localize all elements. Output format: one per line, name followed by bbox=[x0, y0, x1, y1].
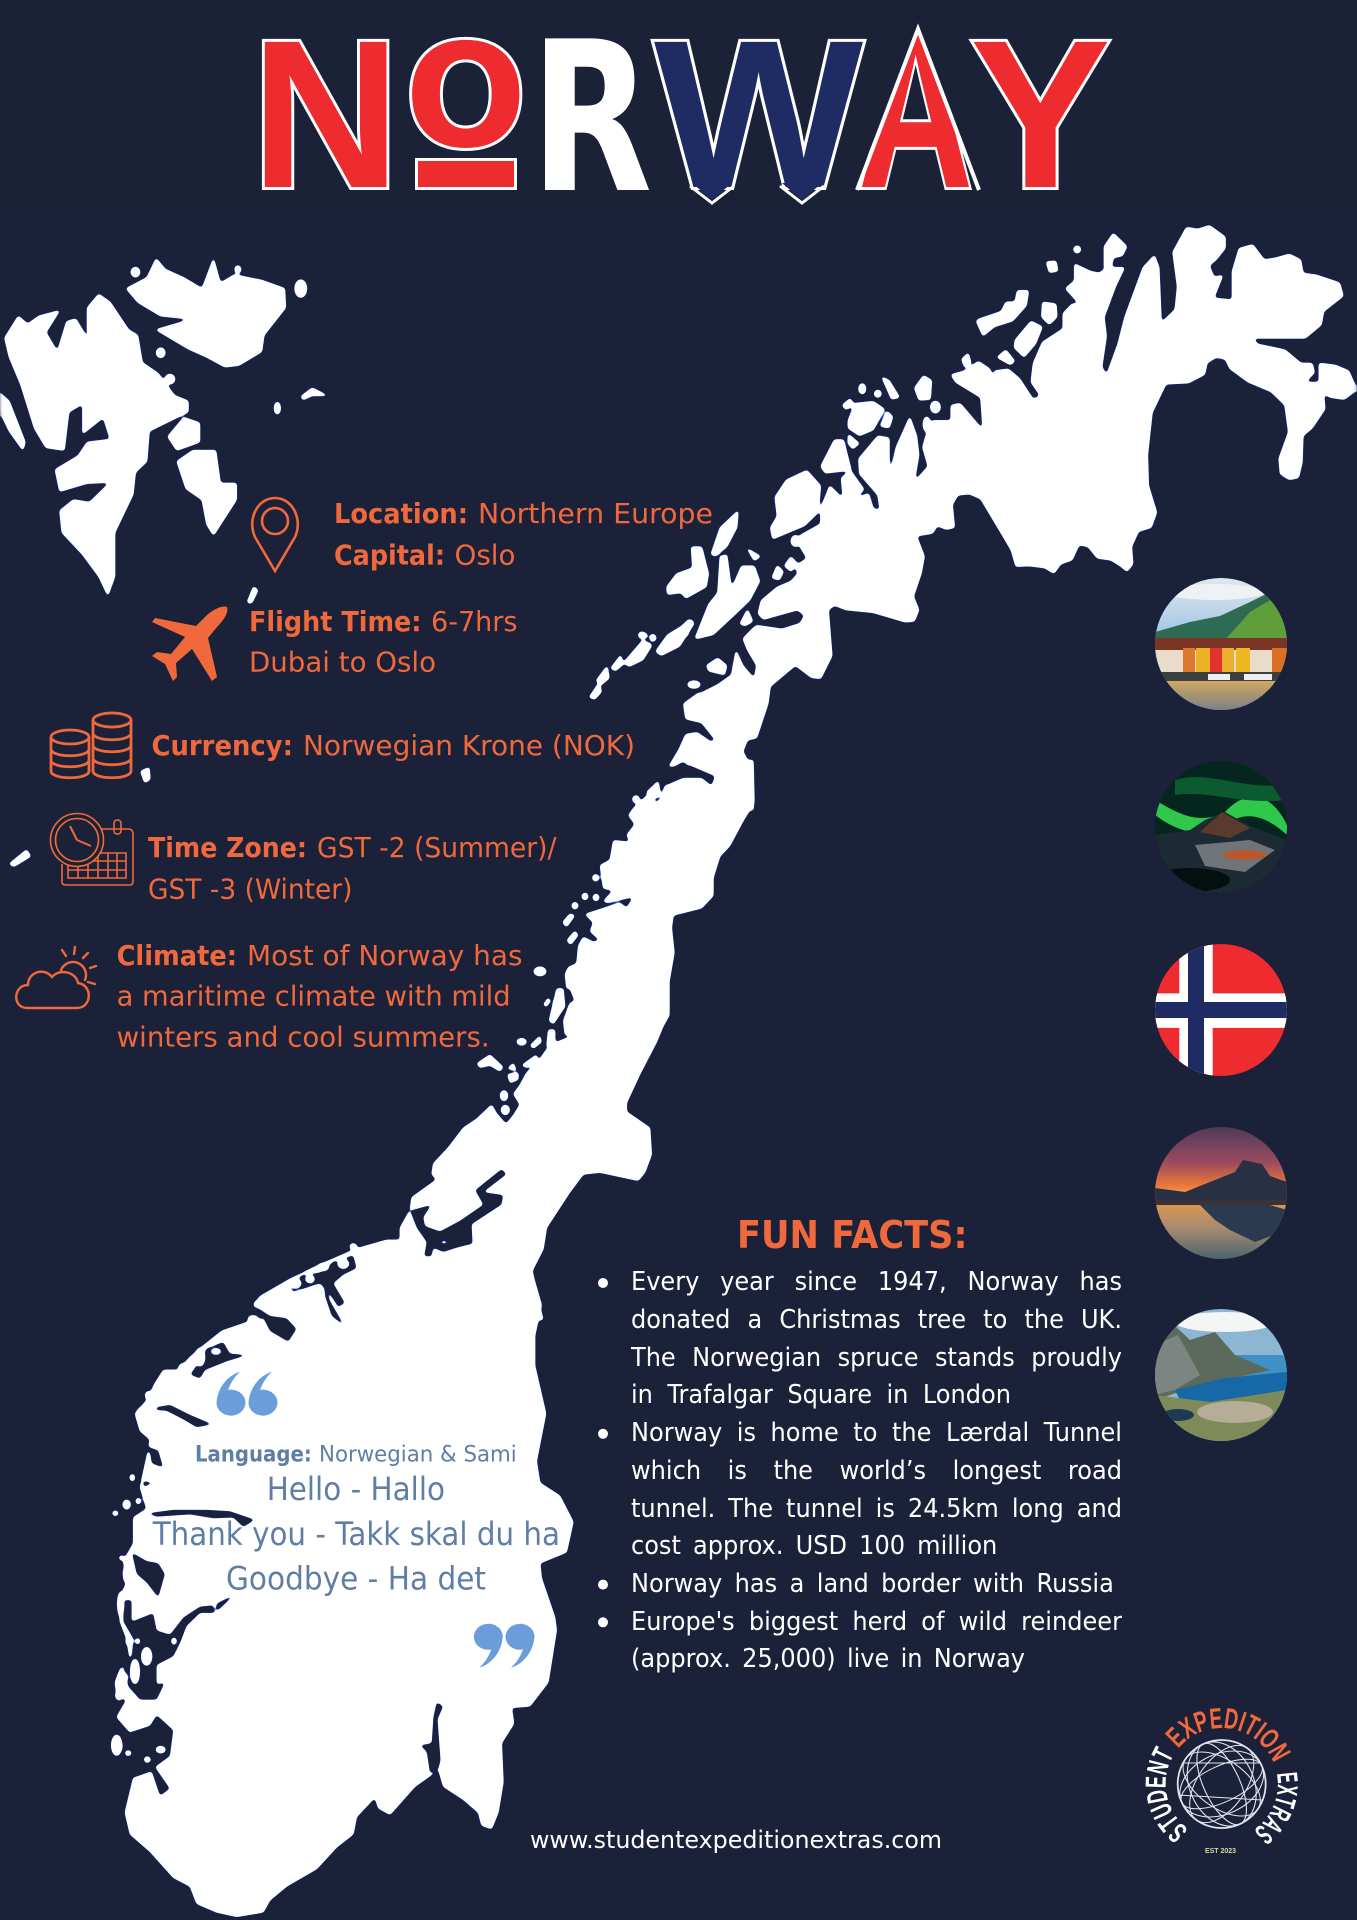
central fjords bbox=[410, 765, 715, 1256]
info: location and capital: Northern Europe bbox=[478, 497, 713, 530]
info: currency bbox=[51, 713, 635, 778]
photo circle: Norwegian flag bbox=[1155, 944, 1287, 1076]
logo word STUDENT: STUDENT bbox=[1146, 1745, 1186, 1842]
fun facts list text: Norway is home to the Lærdal Tunnel bbox=[631, 1418, 1122, 1448]
fun facts list text: Europe's biggest herd of wild reindeer bbox=[631, 1607, 1122, 1637]
language phrases: Language: bbox=[195, 1443, 312, 1468]
icon: airplane bbox=[152, 607, 227, 681]
fun facts list text: donated a Christmas tree to the UK. bbox=[631, 1305, 1122, 1335]
southern Norway mainland bbox=[115, 1240, 573, 1917]
northern Norway mainland and islands bbox=[640, 225, 1357, 810]
photo circle: northern lights bbox=[1150, 761, 1287, 893]
fun facts heading: FUN FACTS: bbox=[737, 1213, 968, 1257]
info: flight time bbox=[152, 605, 518, 681]
info: flight time: Dubai to Oslo bbox=[249, 646, 436, 678]
fun facts list text: The Norwegian spruce stands proudly bbox=[631, 1343, 1122, 1373]
info: time zone bbox=[50, 814, 557, 906]
info: climate bbox=[16, 939, 522, 1054]
fun facts list text: tunnel. The tunnel is 24.5km long and bbox=[631, 1494, 1122, 1524]
fjords and channels bbox=[123, 765, 715, 1796]
photo circle: Bergen harbour bbox=[1155, 578, 1287, 711]
fun facts list text: in Trafalgar Square in London bbox=[631, 1380, 1011, 1410]
letter R: R bbox=[530, 0, 652, 240]
info: time zone: Time Zone: bbox=[148, 831, 307, 864]
language phrases bbox=[152, 1443, 560, 1598]
icon: map pin bbox=[252, 498, 298, 571]
info: location and capital: Oslo bbox=[454, 538, 516, 572]
fun facts list text: (approx. 25,000) live in Norway bbox=[631, 1644, 1025, 1674]
southern fjords bbox=[123, 1243, 473, 1796]
Svalbard islands bbox=[0, 258, 694, 867]
icon: coin stacks bbox=[51, 713, 131, 778]
fun facts list text: Every year since 1947, Norway has bbox=[631, 1267, 1122, 1297]
language phrases: Goodbye - Ha det bbox=[226, 1560, 486, 1598]
letter N: N bbox=[251, 0, 400, 232]
logo globe bbox=[1169, 1731, 1274, 1837]
logo: Student Expedition Extras bbox=[1146, 1708, 1298, 1855]
icon: clock and calendar bbox=[50, 814, 133, 885]
letter W: W bbox=[654, 0, 863, 232]
info: location and capital bbox=[252, 497, 713, 572]
fun facts list text: cost approx. USD 100 million bbox=[631, 1531, 997, 1561]
info: climate: winters and cool summers. bbox=[117, 1021, 490, 1054]
info: location and capital: Capital: bbox=[334, 538, 445, 572]
info: flight time: 6-7hrs bbox=[431, 605, 518, 638]
language phrases: Hello - Hallo bbox=[267, 1470, 445, 1508]
info: time zone: GST -2 (Summer)/ bbox=[317, 831, 557, 864]
info: climate: Most of Norway has bbox=[247, 939, 522, 972]
info: climate: a maritime climate with mild bbox=[117, 980, 511, 1012]
icon: closing quotation mark bbox=[474, 1624, 534, 1668]
fun facts list text: Norway has a land border with Russia bbox=[631, 1569, 1113, 1599]
central Norway mainland and islands bbox=[400, 760, 754, 1320]
info: climate: Climate: bbox=[117, 939, 237, 972]
icon: cloud and sun bbox=[16, 947, 96, 1008]
photo circle: sunset over fjord bbox=[1155, 1127, 1287, 1259]
fun facts list text: which is the world’s longest road bbox=[631, 1456, 1122, 1486]
photo circle: Lofoten mountains bbox=[1155, 1309, 1287, 1441]
logo word EXPEDITION: EXPEDITION bbox=[1164, 1708, 1291, 1762]
title: NORWAY bbox=[251, 0, 1111, 240]
letter Y: Y bbox=[970, 0, 1111, 232]
icon: opening quotation mark bbox=[216, 1372, 277, 1416]
website url: www.studentexpeditionextras.com bbox=[530, 1826, 942, 1854]
fun facts bullets bbox=[598, 1278, 608, 1627]
info: currency: Norwegian Krone (NOK) bbox=[303, 729, 635, 762]
southern coastal islets bbox=[111, 1243, 357, 1763]
info: location and capital: Location: bbox=[334, 497, 468, 530]
info: currency: Currency: bbox=[152, 729, 293, 762]
fun facts list text bbox=[631, 1267, 1122, 1674]
language phrases: Norwegian & Sami bbox=[319, 1443, 517, 1468]
info: time zone: GST -3 (Winter) bbox=[148, 872, 352, 906]
logo est date: EST 2023 bbox=[1205, 1848, 1236, 1855]
info: flight time: Flight Time: bbox=[249, 605, 422, 638]
language phrases: Thank you - Takk skal du ha bbox=[152, 1515, 560, 1553]
logo word EXTRAS: EXTRAS bbox=[1256, 1772, 1298, 1844]
letter O with underline bar: O bbox=[405, 13, 527, 180]
